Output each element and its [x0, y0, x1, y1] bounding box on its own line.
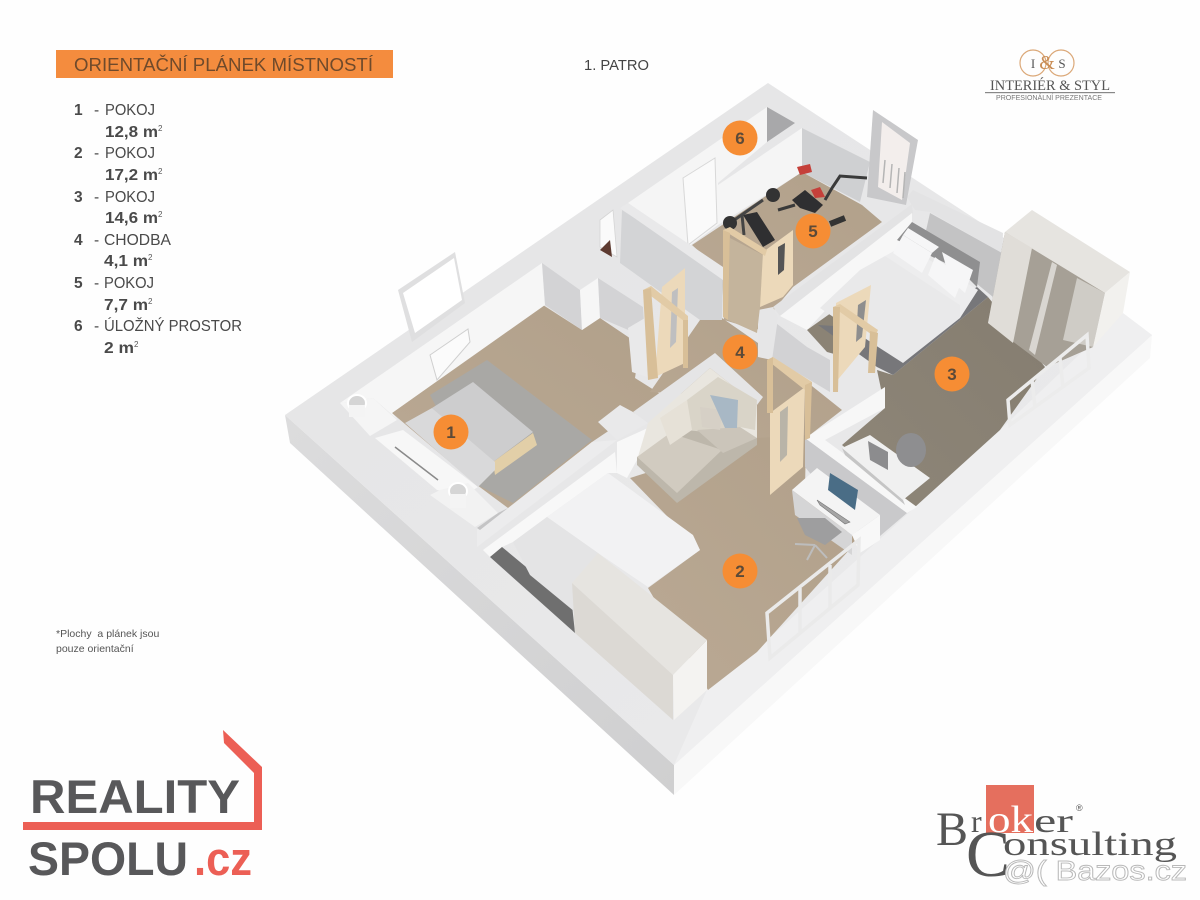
office chair	[795, 518, 842, 560]
wall: pillar and sofa niche	[598, 353, 763, 495]
radiator	[430, 329, 470, 380]
bathroom niche	[600, 210, 617, 257]
legend row 2: 2	[158, 167, 163, 176]
mattress	[885, 245, 978, 318]
marker 1: 1	[446, 423, 456, 442]
legend row 6	[74, 318, 242, 357]
door to room 2	[767, 357, 812, 495]
legend row 4	[74, 232, 172, 270]
pillows	[893, 228, 973, 298]
marker 2: 2	[735, 562, 745, 581]
logo: Reality Spolu: SPOLU	[28, 832, 188, 885]
logo: Broker Consulting: er	[1034, 803, 1074, 840]
legend row 4: 4,1 m	[104, 253, 148, 270]
window	[767, 540, 859, 658]
logo: Interiér & Styl: INTERIÉR & STYL	[990, 77, 1110, 94]
logo: Broker Consulting: C	[966, 818, 1010, 891]
mattress	[432, 382, 533, 462]
floor: room 3	[842, 297, 1045, 507]
logo: Reality Spolu	[23, 730, 262, 885]
room 5 furniture	[723, 110, 918, 255]
legend row 1: 1	[74, 102, 83, 119]
legend row 4: 2	[148, 253, 153, 262]
marker 4	[722, 334, 758, 370]
walls: central grey	[620, 203, 723, 320]
door to room 3	[833, 285, 878, 392]
marker 6	[722, 120, 758, 156]
logo: Interiér & Styl: PROFESIONÁLNÍ PREZENTACE	[996, 93, 1102, 102]
logo emblem: &	[1039, 52, 1055, 74]
bed frame	[493, 433, 537, 475]
marker 5: 5	[808, 222, 818, 241]
marker 3: 3	[947, 365, 957, 384]
outer shell	[285, 83, 1152, 795]
legend row 1: POKOJ	[105, 102, 155, 119]
desk and computer	[842, 433, 930, 505]
legend row 4: -	[94, 232, 99, 249]
legend row 1: -	[94, 102, 99, 119]
logo: Broker Consulting: ®	[1076, 803, 1083, 813]
legend row 3: 2	[158, 210, 163, 219]
duvet	[820, 256, 960, 363]
floor plan: 3D model	[285, 83, 1152, 795]
room 2 furniture	[490, 377, 880, 720]
logo: Interiér & Styl	[985, 50, 1115, 102]
footnote: *Plochy a plánek jsou	[56, 628, 159, 640]
legend row 5: 5	[74, 275, 83, 292]
legend row 5: 2	[148, 297, 153, 306]
walls: rooms 2 and 3 divider	[805, 387, 917, 553]
walls: room 5	[718, 128, 870, 225]
duvet band	[405, 408, 495, 487]
title banner	[56, 50, 393, 78]
logo emblem: S	[1058, 56, 1066, 71]
watermark: @( Bazos.cz	[1003, 855, 1187, 886]
legend row 6: 2 m	[104, 340, 134, 357]
logo emblem: I	[1031, 56, 1035, 71]
headboard shadow	[490, 547, 575, 633]
rug	[430, 360, 592, 503]
legend row 3: 14,6 m	[105, 210, 158, 227]
wall: divider rooms 1 and 2	[477, 440, 617, 557]
legend row 1: 12,8 m	[105, 124, 158, 141]
nightstand right	[430, 483, 498, 527]
floor label: 1. PATRO	[584, 57, 649, 74]
marker 2	[722, 554, 758, 588]
marker 3	[934, 356, 970, 392]
walls: room 1	[340, 263, 656, 420]
legend row 1	[74, 102, 163, 141]
legend row 3: POKOJ	[105, 189, 155, 206]
legend row 4: CHODBA	[104, 232, 172, 249]
legend row 2: 2	[74, 145, 83, 162]
marker 4: 4	[735, 343, 745, 362]
door to room 1	[643, 268, 688, 380]
bed base	[818, 287, 988, 375]
logo: Reality Spolu: REALITY	[30, 770, 240, 823]
legend row 6: 2	[134, 340, 139, 349]
logo: Broker Consulting: ok	[988, 799, 1033, 841]
headboard	[897, 222, 980, 287]
wardrobe	[988, 210, 1130, 367]
legend row 2: POKOJ	[105, 145, 155, 162]
window	[398, 252, 465, 342]
footnote: pouze orientační	[56, 643, 134, 655]
legend row 5	[74, 275, 154, 314]
doors	[643, 227, 878, 495]
window	[1008, 335, 1089, 425]
logo: Reality Spolu: .cz	[194, 832, 252, 885]
logo roof line	[23, 730, 262, 830]
pillows	[375, 430, 478, 495]
footnote	[56, 628, 159, 655]
marker 1	[434, 414, 468, 450]
floor: room 1	[392, 305, 662, 508]
floor: room 2	[630, 435, 860, 690]
legend row 1: 2	[158, 124, 163, 133]
legend row 3: -	[94, 189, 99, 206]
exercise bike	[766, 164, 867, 213]
balcony door	[867, 110, 918, 205]
legend row 6: -	[94, 318, 99, 335]
pillow crease	[395, 447, 438, 480]
legend row 3: 3	[74, 189, 83, 206]
logo emblem	[1020, 50, 1074, 76]
legend row 3	[74, 189, 163, 227]
floor: room 5	[692, 172, 882, 330]
legend row 2	[74, 145, 163, 184]
room 3 furniture	[818, 210, 1130, 505]
walls: storage 6	[628, 107, 795, 247]
room number markers	[434, 120, 970, 588]
floor: corridor 4	[650, 318, 842, 493]
legend row 5: POKOJ	[104, 275, 154, 292]
marker 5	[796, 214, 830, 248]
legend row 2: 17,2 m	[105, 167, 158, 184]
door to room 5	[723, 227, 793, 333]
weight bench	[723, 200, 845, 255]
logo: Broker Consulting	[936, 785, 1177, 891]
logo: Broker Consulting: onsulting	[1003, 826, 1177, 863]
logo: Broker Consulting: r	[971, 803, 982, 839]
legend row 6: 6	[74, 318, 83, 335]
nightstand left	[340, 395, 397, 436]
desk	[792, 468, 880, 555]
walls: room 3 and 5 divider	[758, 204, 913, 392]
legend row 6: ÚLOŽNÝ PROSTOR	[104, 318, 242, 335]
room 1 furniture	[340, 252, 592, 527]
legend row 2: -	[94, 145, 99, 162]
title banner: ORIENTAČNÍ PLÁNEK MÍSTNOSTÍ	[74, 54, 373, 75]
walls: room 3 back	[907, 190, 1003, 297]
logo: Broker Consulting: B	[936, 803, 968, 856]
bed	[513, 473, 700, 612]
sofa	[637, 377, 757, 503]
legend row 5: 7,7 m	[104, 297, 148, 314]
marker 6: 6	[735, 129, 745, 148]
legend row 5: -	[94, 275, 99, 292]
legend: room list	[74, 102, 242, 357]
legend row 4: 4	[74, 232, 83, 249]
wardrobe	[572, 553, 707, 720]
